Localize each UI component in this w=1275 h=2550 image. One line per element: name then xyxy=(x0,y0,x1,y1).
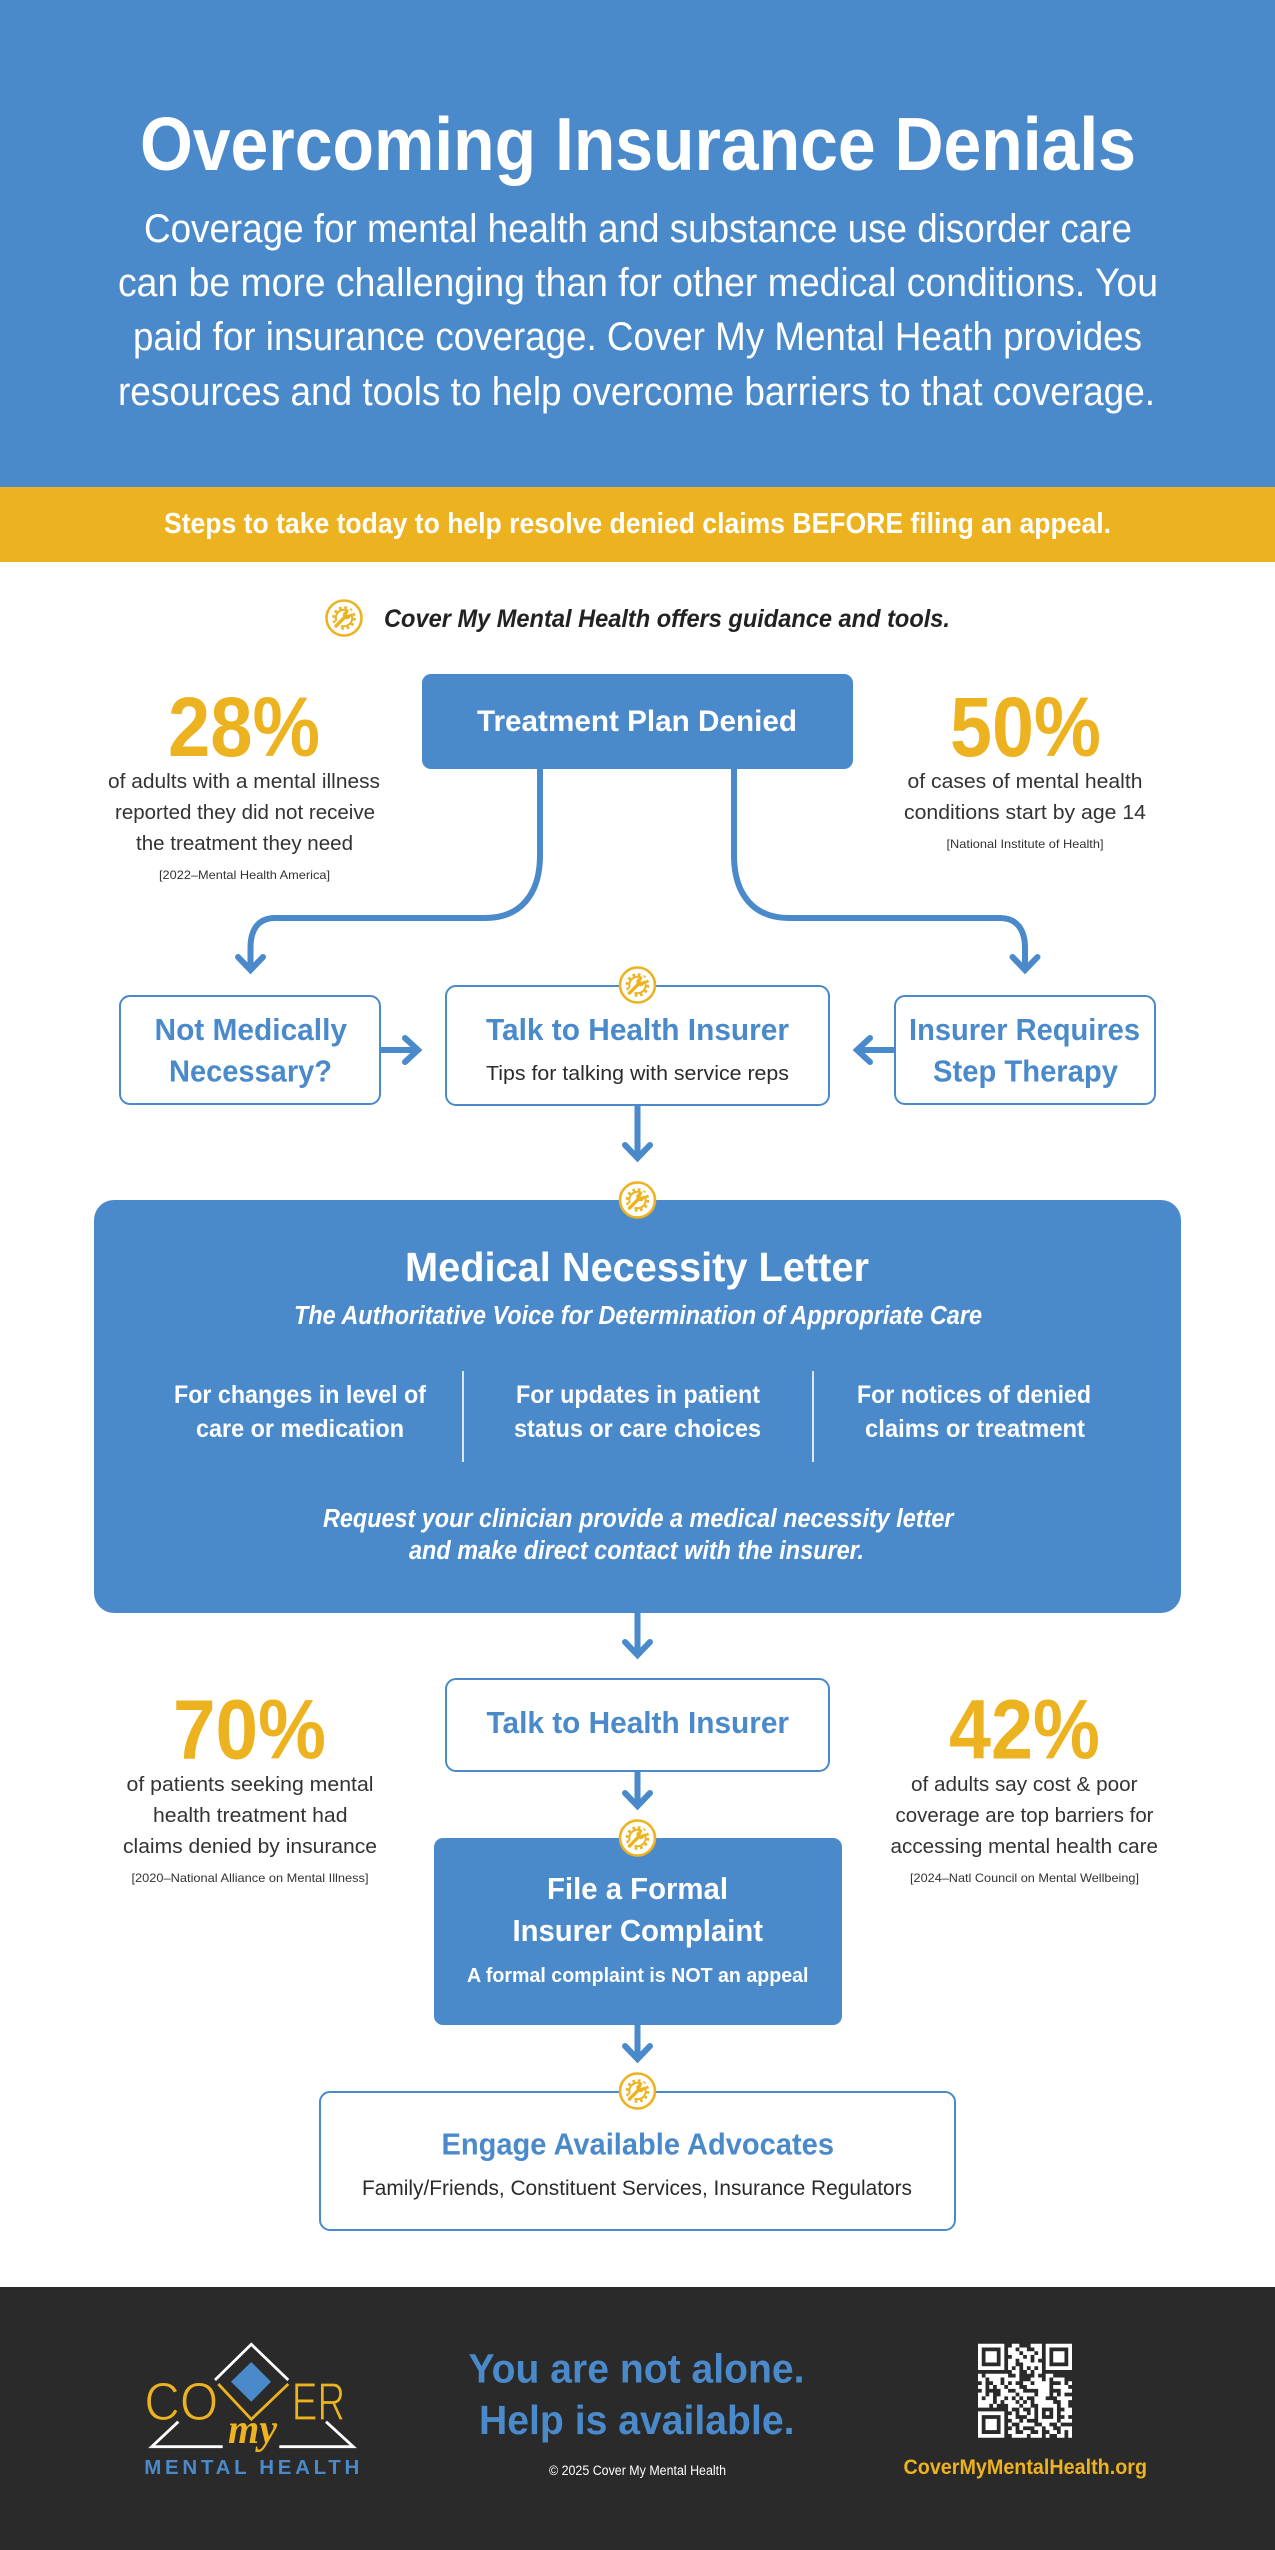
box: not medically necessary: Necessary? xyxy=(169,1054,332,1088)
stat: 70 percent xyxy=(123,1682,377,1885)
arrow: step therapy to talk to insurer xyxy=(857,1038,895,1062)
box: engage available advocates: Family/Friends, Constituent Services, Insurance Regulators xyxy=(362,2177,912,2200)
logo: Cover My Mental Health: MENTAL HEALTH xyxy=(144,2456,359,2479)
stat: 28 percent xyxy=(108,680,380,882)
icon: wrench and gear xyxy=(620,968,655,1002)
logo: Cover My Mental Health: my xyxy=(228,2407,277,2453)
box: file a formal insurer complaint: A formal complaint is NOT an appeal xyxy=(467,1964,808,1987)
box: insurer requires step therapy: Insurer Requires xyxy=(909,1012,1140,1047)
guidance key line xyxy=(326,600,950,636)
column: denied notices: claims or treatment xyxy=(865,1415,1086,1443)
box: insurer requires step therapy: Step Therapy xyxy=(933,1054,1119,1088)
stat: 70 percent: 70% xyxy=(173,1682,326,1776)
box: insurer requires step therapy xyxy=(895,996,1155,1104)
subheading: The Authoritative Voice for Determination of Appropriate Care xyxy=(294,1302,982,1330)
intro paragraph: paid for insurance coverage. Cover My Mental Heath provides xyxy=(133,315,1142,359)
box: engage available advocates xyxy=(320,2074,955,2230)
column: status updates xyxy=(514,1381,761,1443)
arrow: insurer to formal complaint xyxy=(625,1771,650,1806)
stat: 50 percent: of cases of mental health xyxy=(908,770,1142,793)
banner: steps to take today: Steps to take today to help resolve denied claims BEFORE filing an appeal. xyxy=(164,508,1111,540)
box: file a formal insurer complaint xyxy=(434,1820,842,2025)
box: file a formal insurer complaint: Insurer Complaint xyxy=(512,1913,763,1948)
panel: header xyxy=(0,0,1275,487)
panel: footer xyxy=(0,2287,1275,2550)
call to action: and make direct contact with the insurer. xyxy=(409,1537,864,1565)
column: level of care: For changes in level of xyxy=(174,1381,427,1409)
stat: 28 percent: reported they did not receive xyxy=(115,801,375,824)
tagline: Help is available. xyxy=(479,2397,794,2443)
arrow: talk to insurer to medical necessity letter xyxy=(625,1105,650,1158)
call to action: Request your clinician provide a medical necessity letter xyxy=(323,1505,955,1533)
banner: steps to take today xyxy=(0,487,1275,562)
box: not medically necessary xyxy=(120,996,380,1104)
stat: 28 percent: the treatment they need xyxy=(136,832,353,855)
arrow: complaint to advocates xyxy=(625,2025,650,2059)
intro paragraph: can be more challenging than for other medical conditions. You xyxy=(118,261,1158,305)
intro paragraph xyxy=(118,207,1158,414)
icon: wrench and gear xyxy=(620,1820,655,1856)
stat: 70 percent: claims denied by insurance xyxy=(123,1835,377,1858)
box: file a formal insurer complaint: File a Formal xyxy=(547,1871,728,1906)
column: status updates: For updates in patient xyxy=(516,1381,761,1409)
logo: Cover My Mental Health: ER xyxy=(292,2372,345,2432)
tagline: You are not alone. xyxy=(468,2346,804,2392)
stat: 70 percent: health treatment had xyxy=(153,1804,348,1827)
intro paragraph: resources and tools to help overcome barriers to that coverage. xyxy=(118,370,1155,414)
stat: 50 percent: 50% xyxy=(950,680,1101,774)
box: engage available advocates: Engage Available Advocates xyxy=(442,2126,834,2162)
icon: wrench and gear xyxy=(620,1182,655,1218)
logo: Cover My Mental Health xyxy=(144,2344,359,2479)
box: not medically necessary: Not Medically xyxy=(154,1012,348,1047)
column: level of care: care or medication xyxy=(196,1415,404,1443)
stat: 70 percent: [2020–National Alliance on Mental Illness] xyxy=(132,1871,368,1885)
stat: 50 percent: [National Institute of Health] xyxy=(946,837,1104,851)
box: talk to health insurer xyxy=(446,968,829,1105)
box: talk to health insurer: Tips for talking with service reps xyxy=(486,1062,789,1085)
column: level of care xyxy=(174,1381,427,1443)
call to action xyxy=(323,1505,955,1565)
stat: 28 percent: of adults with a mental illness xyxy=(108,770,380,793)
stat: 42 percent: 42% xyxy=(949,1682,1100,1776)
tagline xyxy=(468,2346,804,2443)
stat: 42 percent: coverage are top barriers for xyxy=(896,1804,1154,1827)
stat: 28 percent: 28% xyxy=(168,680,320,774)
heading: Medical Necessity Letter xyxy=(405,1244,869,1290)
box: talk to health insurer second step: Talk to Health Insurer xyxy=(486,1705,789,1740)
arrow: treatment plan to not medically necessary xyxy=(238,765,540,970)
arrow: treatment plan to step therapy xyxy=(734,765,1038,970)
stat: 28 percent: [2022–Mental Health America] xyxy=(159,868,330,882)
box: talk to health insurer second step xyxy=(446,1679,829,1771)
QR code xyxy=(978,2346,1072,2436)
title: Overcoming Insurance Denials xyxy=(140,102,1136,186)
column: denied notices xyxy=(857,1381,1091,1443)
box: treatment plan denied: Treatment Plan Denied xyxy=(477,705,797,738)
logo: Cover My Mental Health: CO xyxy=(144,2372,218,2432)
intro paragraph: Coverage for mental health and substance use disorder care xyxy=(144,207,1132,251)
icon: wrench and gear xyxy=(326,600,362,636)
stat: 42 percent xyxy=(890,1682,1158,1885)
column: denied notices: For notices of denied xyxy=(857,1381,1091,1409)
panel: medical necessity letter xyxy=(94,1182,1181,1613)
stat: 42 percent: [2024–Natl Council on Mental Wellbeing] xyxy=(910,1871,1139,1885)
arrow: not medically necessary to talk to insurer xyxy=(380,1038,418,1062)
guidance key line: Cover My Mental Health offers guidance and tools. xyxy=(384,605,950,633)
box: treatment plan denied xyxy=(422,674,853,769)
stat: 70 percent: of patients seeking mental xyxy=(126,1773,374,1796)
website URL: CoverMyMentalHealth.org xyxy=(904,2456,1147,2479)
stat: 42 percent: accessing mental health care xyxy=(890,1835,1158,1858)
box: talk to health insurer: Talk to Health Insurer xyxy=(486,1012,789,1047)
stat: 50 percent xyxy=(904,680,1146,851)
arrow: letter to talk to insurer xyxy=(625,1613,650,1655)
icon: wrench and gear xyxy=(620,2074,655,2108)
copyright: © 2025 Cover My Mental Health xyxy=(549,2463,726,2478)
stat: 42 percent: of adults say cost & poor xyxy=(911,1773,1138,1796)
column: status updates: status or care choices xyxy=(514,1415,761,1443)
stat: 50 percent: conditions start by age 14 xyxy=(904,801,1146,824)
